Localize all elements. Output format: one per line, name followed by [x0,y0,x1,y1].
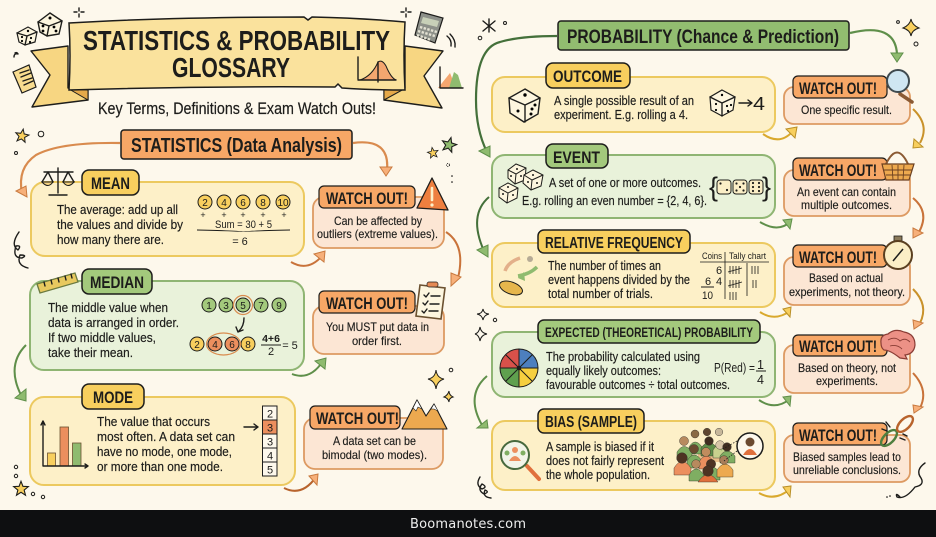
label: event [546,144,608,168]
panel: watch out mean: outliers (extreme values). [317,227,438,241]
icon: broken chain [878,413,916,449]
icon: mountains [402,400,447,429]
panel: watch out expected: WATCH OUT! [799,337,877,356]
panel: watch out bias: WATCH OUT! [799,426,877,445]
panel: watch out event: WATCH OUT! [799,161,877,180]
panel: watch out median: You MUST put data in [326,320,429,334]
mode data table: 5 [267,464,273,476]
panel: watch out mode: WATCH OUT! [316,409,399,428]
formula: probability of red: 1 [757,358,764,372]
text: bias definition: the whole population. [546,467,650,482]
median worked example: 4+6 [262,333,280,345]
footer bar: Boomanotes.com [410,517,526,532]
panel: watch out event: An event can contain [797,185,896,199]
mean worked example: 4 [221,198,227,209]
text: mode definition: most often. A data set can [97,429,235,444]
mean worked example: + [260,210,266,220]
bar chart: mode [41,421,88,468]
text: expected definition [546,349,730,392]
text: outcome definition: A single possible result of an [554,93,694,108]
header: probability: PROBABILITY (Chance & Prediction) [567,27,839,48]
arrow: statistics to mean [16,143,120,197]
event set of dice faces: { [709,172,718,202]
label: median [82,269,152,294]
arrow: median to watch out [292,358,326,376]
median worked example: 7 [258,301,264,312]
icon: sampled person [721,433,763,461]
arrow: median to mode [15,345,26,401]
tally table: Tally chart [729,251,766,261]
panel: watch out expected: experiments. [816,374,878,388]
panel: event [492,144,775,218]
panel: mode [30,384,295,485]
illustration: crowd of people [674,428,735,482]
mode data table: 3 [267,436,273,448]
text: relative frequency definition [548,258,690,301]
text: mode definition: The value that occurs [97,414,210,429]
arrow: event to relative frequency [477,197,489,257]
text: mean definition [57,202,183,247]
mode data table: 4 [267,450,273,462]
text: relative frequency definition: total number of trials. [548,286,653,301]
arrow: mode to watch out [284,474,318,491]
panel: bias [492,409,775,490]
decoration: mid right sparkles [475,309,497,341]
panel: outcome [492,63,775,132]
text: expected definition: The probability calculated using [546,349,700,364]
arrow: outcome to watch out [763,127,797,139]
label: mean: MEAN [91,174,130,193]
arrow: statistics to watch out [353,142,392,176]
panel: watch out relative frequency: Based on actual [809,271,883,285]
event set of dice faces: } [762,172,771,202]
panel: watch out relative frequency: experiments, not theory. [789,285,905,299]
text: relative frequency definition: event happens divided by the [548,272,690,287]
arrow: expected to watch out [759,396,791,406]
subtitle: Key Terms, Definitions & Exam Watch Outs! [98,100,376,118]
panel: watch out event: multiple outcomes. [801,198,892,212]
mode data table: 3 [267,422,273,434]
label: event: EVENT [553,148,601,167]
panel: watch out event [784,152,914,216]
label: relative frequency: RELATIVE FREQUENCY [545,235,684,252]
mean worked example: + [200,210,206,220]
arrow: watch out to next watch out [446,232,461,286]
label: relative frequency [538,230,690,253]
icon: die gives four: 4 [753,94,765,114]
mean worked example: 10 [277,198,289,209]
arrow: watch out to watch out 2 [913,198,923,238]
median worked example [190,296,298,358]
formula: probability of red: 4 [757,373,764,387]
icon: bell curve [358,57,396,82]
label: outcome [546,63,630,88]
text: bias definition: A sample is biased if it [546,439,654,454]
panel: watch out mean: WATCH OUT! [326,189,408,208]
panel: watch out mode [304,400,447,469]
mean worked example: 8 [260,198,266,209]
panel: watch out bias [784,413,916,482]
label: bias: BIAS (SAMPLE) [545,414,637,431]
panel: watch out mode: bimodal (two modes). [322,448,427,462]
label: mode [82,384,144,409]
label: median: MEDIAN [90,273,144,292]
text: mean definition: The average: add up all [57,202,178,217]
tally table: 6 [705,276,711,288]
header: statistics: STATISTICS (Data Analysis) [131,135,342,157]
icon: calculator [415,12,455,47]
icon: small distribution chart [438,67,463,88]
panel: watch out outcome: One specific result. [801,103,892,117]
median worked example: 1 [206,301,212,312]
mean worked example: 6 [240,198,246,209]
title text: GLOSSARY [172,52,290,83]
median worked example: 9 [276,301,282,312]
text: mean definition: how many there are. [57,232,164,247]
text: event definition [522,175,707,208]
arrow: to mode table [244,424,258,430]
text: outcome definition [554,93,694,122]
icon: warning triangle [417,178,448,210]
arrow: probability to outcome [476,36,557,157]
mean worked example: + [240,210,246,220]
title banner [31,17,443,108]
text: relative frequency definition: The number of times an [548,258,661,273]
icon: ruler [37,273,78,293]
panel: watch out relative frequency: WATCH OUT! [799,248,877,267]
median worked example: 6 [229,340,235,351]
icon: spinner wheel [500,349,538,387]
decoration: top sparkles [14,8,411,57]
label: expected probability: EXPECTED (THEORETICAL) PROBABILITY [545,325,753,340]
formula: probability of red [714,358,766,387]
decoration: bottom doodles [478,463,925,498]
median worked example: 8 [245,340,251,351]
text: mode definition: have no mode, one mode, [97,444,232,459]
panel: watch out outcome: WATCH OUT! [799,79,877,98]
panel: expected probability [492,320,775,397]
icon: die [509,89,540,122]
text: bias definition: does not fairly represent [546,453,664,468]
arrow: event to watch out [760,219,792,229]
label: mean [82,170,139,195]
median worked example: = 5 [282,340,298,352]
header: statistics [121,130,352,159]
icon: scales [42,168,74,195]
panel: watch out bias: Biased samples lead to [793,450,901,464]
panel: median [30,269,304,370]
mode data table: 2 [267,408,273,420]
title text: STATISTICS & PROBABILITY [83,25,390,56]
text: bias definition [546,439,664,482]
tally table [700,251,769,302]
text: outcome definition: experiment. E.g. rolling a 4. [554,107,688,122]
label: mode: MODE [93,388,133,407]
panel: watch out mode: A data set can be [333,434,416,448]
panel: watch out expected [784,330,915,393]
median worked example: 2 [194,340,200,351]
text: mean definition: the values and divide by [57,217,183,232]
icon: dice [17,13,62,45]
arrow: probability to watch out [850,30,903,62]
decoration: left doodles and stars [14,128,458,268]
mean worked example [197,195,290,248]
panel: watch out relative frequency [784,236,912,305]
mean worked example: = 6 [232,236,248,248]
mean worked example: + [281,210,287,220]
text: expected definition: favourable outcomes ÷ total outcomes. [546,377,730,392]
panel: watch out median [313,282,445,354]
text: mode definition: or more than one mode. [97,459,223,474]
label: expected probability [538,320,760,343]
arrow: watch out to watch out 1 [913,109,924,148]
arrow: bias to watch out [759,486,791,497]
event set of dice faces [709,172,771,202]
icon: coin flip [498,256,537,298]
median worked example: 5 [240,301,246,312]
icon: die gives four [710,90,765,116]
panel: relative frequency [492,230,775,307]
icon: brain [881,330,915,359]
median worked example: 4 [212,340,218,351]
icon: three dice [499,164,543,203]
panel: watch out median: order first. [352,334,402,348]
arrow: expected to bias [475,376,488,428]
footer bar [0,510,936,537]
text: median definition [48,300,179,360]
mode data table [262,406,277,476]
text: median definition: If two middle values, [48,330,156,345]
panel: watch out mean: Can be affected by [334,214,422,228]
icon: notepad [13,65,36,93]
label: outcome: OUTCOME [553,67,622,86]
decoration: lower left and mid doodles [14,368,453,499]
text: median definition: data is arranged in order. [48,315,179,330]
icon: magnifier [887,70,912,102]
arrow: relative frequency to watch out [760,307,791,317]
text: event definition: A set of one or more outcomes. [549,175,701,190]
text: median definition: The middle value when [48,300,168,315]
mean worked example: 2 [202,198,208,209]
text: median definition: take their mean. [48,345,133,360]
median worked example: 2 [268,346,274,358]
panel: watch out mean [313,178,448,248]
arrow: mean to watch out [291,251,325,266]
text: event definition: E.g. rolling an even number = {2, 4, 6}. [522,193,707,208]
mean worked example: + [221,210,227,220]
title text [83,25,390,83]
icon: clipboard [416,282,445,319]
tally table: 4 [716,276,722,288]
label: bias [538,409,644,433]
panel: watch out bias: unreliable conclusions. [793,463,901,477]
icon: magnifier with people [501,441,539,479]
header: probability [558,21,849,50]
formula: probability of red: P(Red) = [714,361,755,375]
arrow: watch out to watch out 3 [913,289,923,329]
tally table: Coins [702,251,722,261]
panel: watch out expected: Based on theory, not [798,361,897,375]
text: expected definition: equally likely outcomes: [546,363,661,378]
text: mode definition [97,414,235,474]
tally table: 6 [716,265,722,277]
decoration: top right doodles [478,19,919,46]
panel: mean [31,168,304,256]
panel: watch out median: WATCH OUT! [326,294,408,313]
icon: stopwatch [884,236,912,269]
icon: basket [882,152,914,180]
panel: watch out outcome [784,70,912,124]
arrow: watch out to watch out 4 [913,373,923,413]
tally table: 10 [702,290,713,302]
mean worked example: Sum = 30 + 5 [215,219,272,231]
median worked example: 3 [223,301,229,312]
